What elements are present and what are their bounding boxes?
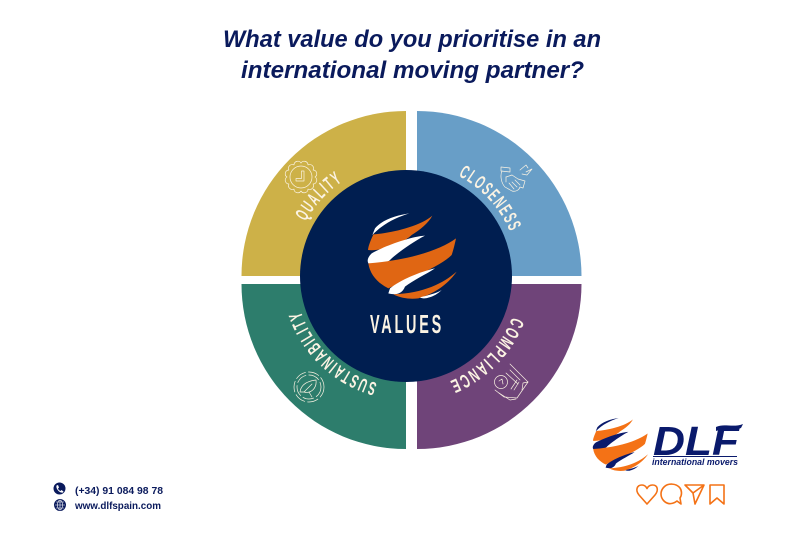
logo wordmark: DLF — [653, 418, 740, 464]
social icons — [637, 484, 724, 504]
title: What value do you prioritise in an — [223, 26, 601, 53]
icon: speech bubble — [661, 484, 682, 504]
icon: recycling leaf — [294, 372, 324, 402]
icon: handshake — [501, 165, 532, 191]
icon: heart — [637, 485, 657, 504]
panel: closeness: CLOSENESS — [460, 166, 521, 230]
icon: document with magnifier — [494, 364, 528, 400]
icon: phone — [54, 482, 66, 494]
values wheel — [242, 111, 582, 449]
panel: quality — [242, 111, 406, 276]
panel: sustainability: SUSTAINABILITY — [288, 314, 376, 395]
website: www.dlfspain.com — [74, 500, 161, 512]
phone number: (+34) 91 084 98 78 — [75, 485, 163, 497]
panel: compliance: COMPLIANCE — [450, 318, 524, 393]
icon: web globe — [54, 500, 66, 510]
centre label: VALUES — [370, 309, 444, 339]
icon: globe logo — [368, 213, 457, 299]
panel: closeness — [417, 111, 582, 276]
panel: sustainability — [242, 284, 406, 449]
icon: bookmark — [710, 485, 724, 504]
panel: compliance — [417, 284, 582, 449]
icon: quality badge — [285, 161, 317, 193]
icon: send — [685, 485, 704, 504]
icon: DLF globe — [593, 418, 648, 471]
logo tagline: international movers — [652, 457, 738, 468]
title — [223, 26, 601, 84]
panel: quality: QUALITY — [296, 171, 340, 220]
DLF logo — [593, 418, 743, 471]
centre circle — [300, 170, 512, 382]
title: international moving partner? — [241, 57, 584, 84]
contact details — [54, 482, 163, 512]
